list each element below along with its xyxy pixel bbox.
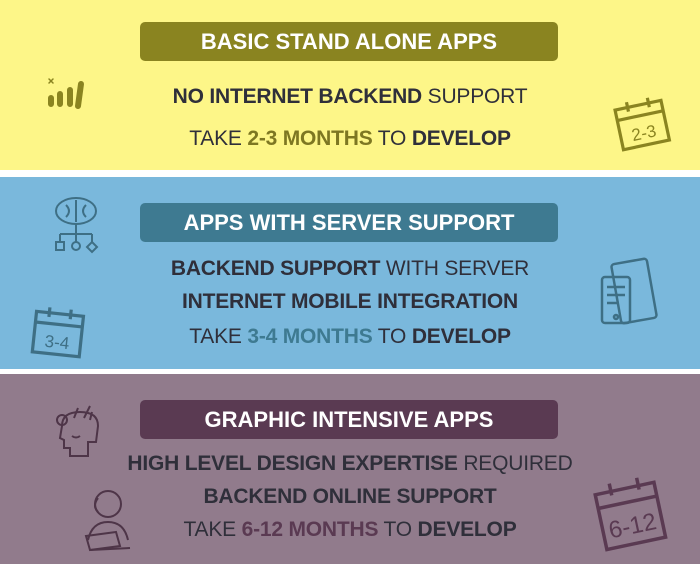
text: internet mobile: INTERNET MOBILE INTEGRATION: [182, 290, 518, 313]
heading: graphic: [140, 400, 558, 439]
heading: graphic: GRAPHIC INTENSIVE APPS: [205, 407, 493, 432]
panel: graphic intensive apps: [0, 374, 700, 564]
panel: basic stand alone apps: [0, 0, 700, 170]
text: 2-3 months: TAKE 2-3 MONTHS TO DEVELOP: [189, 127, 511, 150]
icon: calendar 3-4: [30, 307, 86, 358]
icon: devices: [600, 258, 658, 324]
text: 3-4 months: TAKE 3-4 MONTHS TO DEVELOP: [189, 325, 511, 348]
heading: basic: BASIC STAND ALONE APPS: [201, 29, 497, 54]
heading: basic: [140, 22, 558, 61]
icon: calendar 2-3: 2-3: [630, 121, 658, 145]
icon: brain flowchart: [55, 197, 98, 254]
heading: server: APPS WITH SERVER SUPPORT: [184, 210, 514, 235]
icon: signal bars: [48, 78, 84, 109]
icon: head with tools: [56, 406, 99, 457]
text: high level design: HIGH LEVEL DESIGN EXPERTISE REQUIRED: [127, 452, 573, 475]
icon: person with laptop: [84, 490, 130, 552]
text: backend online: BACKEND ONLINE SUPPORT: [203, 485, 497, 508]
text: no internet: NO INTERNET BACKEND SUPPORT: [173, 85, 527, 108]
panel: apps with server support: [0, 177, 700, 369]
text: 6-12 months: TAKE 6-12 MONTHS TO DEVELOP: [183, 518, 517, 541]
icon: calendar 2-3: [613, 98, 672, 152]
icon: calendar 3-4: 3-4: [44, 331, 71, 353]
text: backend support: BACKEND SUPPORT WITH SERVER: [171, 257, 529, 280]
heading: server: [140, 203, 558, 242]
icon: calendar 6-12: 6-12: [606, 508, 659, 544]
icon: calendar 6-12: [593, 478, 668, 552]
